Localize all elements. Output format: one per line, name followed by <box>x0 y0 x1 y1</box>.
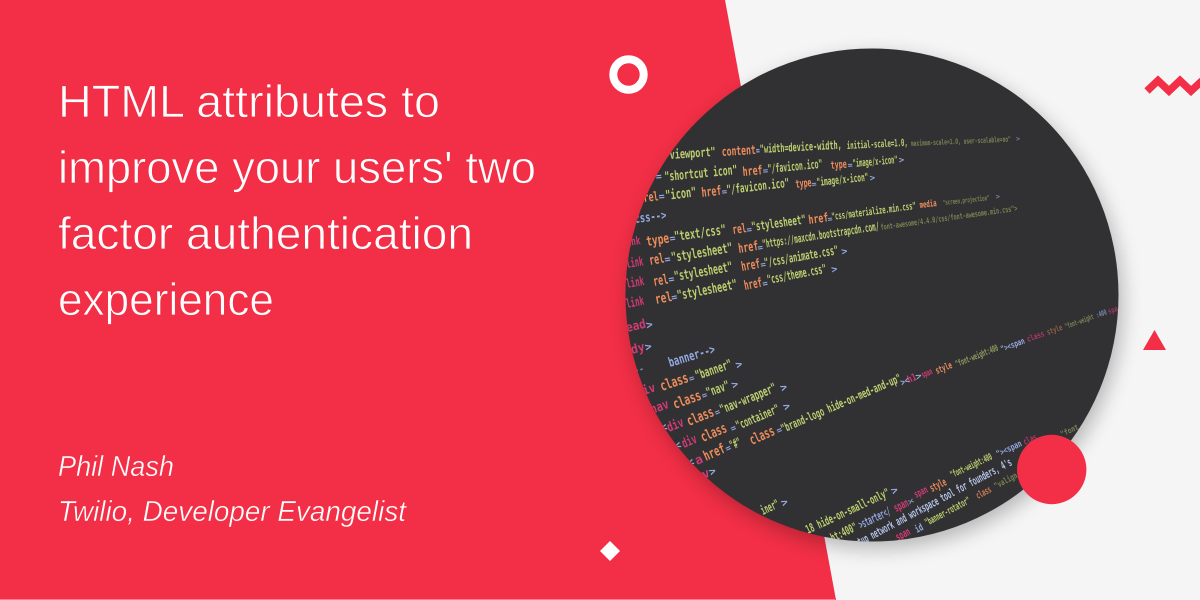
code lines: "/css/animate.css" <box>763 242 839 270</box>
code lines: = <box>762 167 769 177</box>
code lines: a <box>692 451 705 468</box>
code lines: class <box>658 370 691 395</box>
code lines: = <box>721 187 728 198</box>
code lines: 18 hide-on-small-only" <box>803 486 892 537</box>
code lines: style <box>934 360 954 377</box>
code lines: > <box>889 483 901 498</box>
code lines: > <box>841 246 848 258</box>
code lines: rel <box>731 220 747 237</box>
code lines: href <box>701 184 722 201</box>
code lines: "icon" <box>665 184 697 204</box>
code lines: span <box>893 525 913 544</box>
code lines: iner" <box>758 496 781 518</box>
code lines: "nav-wrapper" <box>718 381 779 418</box>
code lines: media <box>919 198 937 211</box>
code lines: "><span <box>995 439 1024 460</box>
code lines: "font-weight <box>1064 312 1095 331</box>
bottom edge highlight <box>0 599 835 600</box>
code lines: > <box>779 495 791 510</box>
code lines: = <box>688 373 697 385</box>
code lines: "stylesheet" <box>676 277 739 304</box>
code lines: :400 <box>1095 308 1108 320</box>
code lines: href <box>740 257 761 275</box>
code lines: link <box>625 293 646 311</box>
code lines: = <box>669 233 676 245</box>
code lines: = <box>701 390 710 402</box>
code lines: class <box>671 388 704 413</box>
code lines: = <box>664 254 671 266</box>
code lines: href <box>742 162 763 179</box>
code lines: < <box>658 420 670 435</box>
icon: red triangle <box>1143 330 1166 350</box>
title: improve your users' two <box>58 142 536 193</box>
code lines: > <box>778 380 790 395</box>
title: factor authentication <box>58 208 473 259</box>
code lines: = <box>847 161 853 170</box>
code lines: content <box>721 142 756 159</box>
code lines: tup network and workspace tool for founders, 4's <box>855 455 1014 549</box>
code lines: rel <box>652 272 669 290</box>
code lines <box>624 135 1119 549</box>
code lines: "screen,projection" <box>942 194 990 207</box>
red diagonal panel <box>0 0 836 600</box>
code lines: class <box>747 423 777 449</box>
code lines: ht:400" <box>828 520 859 545</box>
code lines: > <box>995 193 1000 201</box>
code lines: rel <box>648 251 665 269</box>
code lines: = <box>757 243 764 254</box>
code lines: > <box>781 399 793 414</box>
code lines: = <box>670 292 678 304</box>
code lines: >starter</ <box>856 504 893 532</box>
code lines: style <box>1046 323 1064 337</box>
code lines: = <box>762 279 769 290</box>
code lines: "container" <box>733 401 782 433</box>
code lines: link <box>625 273 646 291</box>
code lines: = <box>724 443 734 455</box>
code lines: > <box>707 464 719 479</box>
code lines: href <box>737 239 759 257</box>
code lines: initial-scale=1.0, <box>847 137 908 152</box>
code lines: "css/materialize.min.css" <box>831 200 917 223</box>
code lines: id <box>913 521 925 536</box>
code lines: = <box>729 423 739 435</box>
code lines: "stylesheet" <box>670 240 734 266</box>
code lines: span <box>920 367 934 381</box>
code lines: "font <box>1059 423 1080 439</box>
code lines: "/favicon.ico" <box>767 157 823 176</box>
code lines: nav <box>648 397 671 418</box>
code lines: font-awesome/4.4.0/css/font-awesome.min.css"> <box>880 203 1018 232</box>
code lines: > <box>645 318 654 332</box>
code lines: = <box>746 225 753 236</box>
code lines: "stylesheet" <box>673 259 734 285</box>
code lines: = <box>760 260 767 271</box>
author: Twilio, Developer Evangelist <box>58 496 408 528</box>
code lines: "nav" <box>704 378 732 401</box>
code lines: rel <box>643 188 659 205</box>
code lines: "font-weight:400 <box>954 343 1000 370</box>
code lines: span <box>891 496 911 515</box>
code lines: clas <box>1022 433 1039 448</box>
code lines: "valign <box>992 470 1019 492</box>
code lines: v <box>699 465 713 482</box>
code lines: "><span <box>999 337 1026 355</box>
title: experience <box>58 274 274 325</box>
code lines: span <box>912 485 930 501</box>
code lines: type <box>645 231 670 250</box>
code lines: >< <box>907 496 916 508</box>
code lines: css--> <box>634 207 667 226</box>
code lines: rel <box>654 289 673 308</box>
icon: white diamond <box>600 541 620 561</box>
circle background <box>620 45 1125 545</box>
code lines: > <box>898 156 905 166</box>
code lines: > <box>869 173 876 184</box>
code lines: > <box>914 371 924 383</box>
code lines: "image/x-icon" <box>816 171 869 189</box>
code lines: = <box>655 172 662 183</box>
icon: red circle <box>1017 435 1086 504</box>
code lines: div <box>680 432 699 452</box>
code lines: > <box>734 357 745 372</box>
code lines: -- <box>633 364 645 377</box>
code lines: class <box>1026 329 1046 344</box>
code lines: > <box>644 340 654 354</box>
code lines: "shortcut icon" <box>664 163 738 185</box>
code lines: >< <box>899 375 911 389</box>
circle shadow <box>630 56 1122 548</box>
code lines: href <box>743 276 763 294</box>
author <box>58 451 408 528</box>
code lines: "#" <box>728 435 744 454</box>
code lines: = <box>668 274 675 286</box>
code lines: href <box>807 210 829 227</box>
code lines: "stylesheet" <box>750 211 807 234</box>
code lines: dy <box>629 339 647 357</box>
code lines: maximum-scale=1.0, user-scalable=no" <box>911 135 1011 148</box>
code lines: href <box>701 441 728 465</box>
code lines: viewport" <box>669 144 716 162</box>
icon: red zigzag <box>1147 79 1200 91</box>
code lines: "image/x-icon" <box>852 154 898 170</box>
code lines: "width=device-width, <box>759 138 842 156</box>
code lines: < <box>672 438 684 453</box>
code lines: "text/css" <box>673 222 727 245</box>
code lines: div <box>665 415 686 436</box>
code lines: = <box>775 425 785 437</box>
code lines: type <box>795 175 812 191</box>
code lines: = <box>827 214 833 224</box>
title <box>58 76 536 325</box>
code lines: "/favicon.ico" <box>726 175 790 197</box>
code lines: > <box>730 377 741 392</box>
title: HTML attributes to <box>58 76 440 127</box>
code lines: ead <box>624 316 647 335</box>
code lines: = <box>811 180 817 189</box>
code lines: "banner-rotator" <box>923 495 973 529</box>
code lines: ink <box>625 233 641 249</box>
code lines: > <box>830 264 838 276</box>
code lines: h1 <box>906 372 918 386</box>
code lines: class <box>974 484 994 502</box>
code lines: = <box>658 191 665 203</box>
code screenshot circle <box>620 45 1125 549</box>
code lines: = <box>756 146 760 157</box>
icon: white ring <box>613 59 644 90</box>
code lines: "https://maxcdn.bootstrapcdn.com/ <box>761 219 880 251</box>
code lines: < <box>685 455 697 470</box>
code lines: type <box>830 158 847 172</box>
author: Phil Nash <box>58 451 174 483</box>
code lines: "css/theme.css" <box>766 261 827 287</box>
code lines: "brand-logo hide-on-med-and-up" <box>779 371 903 436</box>
code lines: style <box>928 475 949 495</box>
code lines: "font-weight:400 <box>949 452 994 481</box>
code lines: banner--> <box>667 342 717 371</box>
code lines: = <box>713 407 723 419</box>
code lines: "banner" <box>693 357 734 384</box>
code lines: link <box>625 253 645 271</box>
code lines: class <box>698 420 729 446</box>
code lines: spa <box>1107 304 1119 316</box>
code lines: > <box>1016 135 1020 143</box>
code lines: iv <box>640 379 658 398</box>
code lines: class <box>685 404 716 430</box>
